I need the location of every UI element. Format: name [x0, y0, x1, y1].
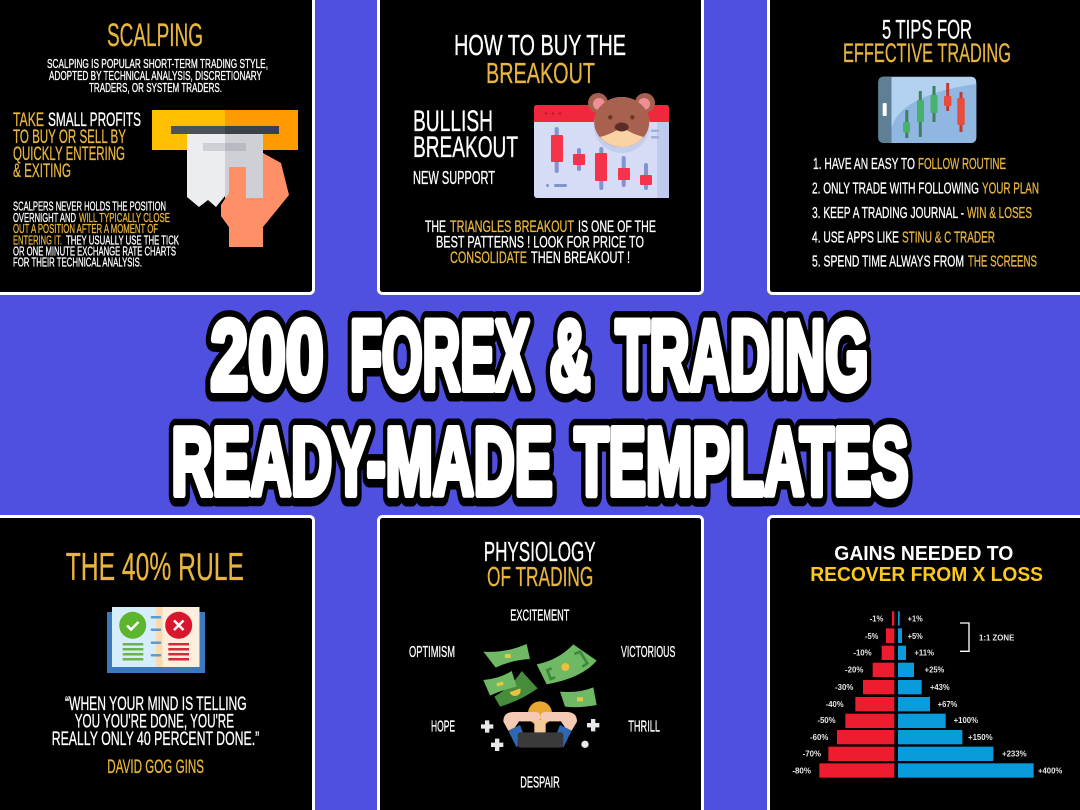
text block: bullish breakout: BREAKOUT — [413, 131, 518, 164]
text block: scalpers explanation: SCALPERS NEVER HOLDS THE POSITION — [13, 200, 166, 214]
gain labels — [908, 614, 1062, 776]
gain labels: +150% — [968, 733, 993, 742]
text block: quote: REALLY ONLY 40 PERCENT DONE.” — [52, 729, 259, 750]
icon: trader with falling money — [481, 644, 599, 751]
text block: tips list: FOLLOW ROUTINE — [918, 156, 1006, 173]
labels: emotions — [409, 608, 675, 791]
heading: physiology of trading — [484, 536, 596, 592]
text block: scalpers explanation — [13, 200, 179, 270]
bracket: 1:1 zone — [960, 623, 1015, 651]
gain labels: +1% — [908, 614, 923, 623]
text block: tips list: WIN & LOSES — [967, 205, 1032, 222]
loss bars — [819, 611, 894, 778]
text block: triangles breakout: TRIANGLES BREAKOUT — [450, 217, 574, 236]
text block: take small profits: SMALL PROFITS — [48, 109, 141, 131]
text block: take small profits: TAKE — [13, 109, 44, 131]
gain labels: +11% — [914, 649, 934, 658]
text block: triangles breakout: CONSOLIDATE — [450, 248, 527, 267]
labels: emotions: VICTORIOUS — [621, 644, 675, 661]
text block: tips list: YOUR PLAN — [982, 181, 1039, 198]
text: quote author: DAVID GOG GINS — [107, 756, 204, 778]
heading: how to buy the breakout: HOW TO BUY THE — [454, 30, 626, 62]
title: 200 forex and trading ready-made templates: TRADING — [616, 300, 868, 410]
panel: 5 tips — [768, 0, 1080, 294]
title: 200 forex and trading ready-made templates: READY-MADE — [172, 408, 552, 516]
text block: scalpers explanation: OVERNIGHT AND — [13, 211, 76, 225]
loss labels — [792, 614, 883, 776]
text block: scalping intro: SCALPING IS POPULAR SHORT-TERM TRADING STYLE, — [47, 56, 268, 71]
text block: triangles breakout: IS ONE OF THE — [578, 217, 656, 236]
text block: triangles breakout: THEN BREAKOUT ! — [531, 248, 630, 267]
text block: tips list: 5. SPEND TIME ALWAYS FROM — [812, 254, 964, 271]
text block: bullish breakout — [413, 105, 518, 188]
icon: pros and cons book — [107, 607, 205, 673]
gain bars — [898, 611, 1034, 778]
labels: emotions: DESPAIR — [520, 774, 560, 791]
text block: tips list: 4. USE APPS LIKE — [812, 229, 899, 246]
text block: scalping intro — [47, 56, 268, 95]
loss labels: -70% — [803, 750, 821, 759]
heading: gains needed to recover: RECOVER FROM X LOSS — [810, 564, 1043, 586]
loss labels: -10% — [853, 649, 872, 658]
text block: quote: YOU YOU'RE DONE, YOU'RE — [75, 712, 234, 733]
heading: 5 tips for effective trading: 5 TIPS FOR — [882, 14, 972, 44]
gain labels: +25% — [925, 666, 944, 675]
icon: phone with candlesticks — [878, 77, 976, 143]
labels: emotions: THRILL — [628, 718, 660, 735]
bracket: 1:1 zone: 1:1 ZONE — [979, 633, 1015, 642]
title: 200 forex and trading ready-made templates: 200 — [210, 300, 324, 412]
text block: take small profits: TO BUY OR SELL BY — [13, 126, 126, 148]
chart: loss and recovery pyramid — [792, 611, 1062, 778]
title: 200 forex and trading ready-made templates: FOREX — [350, 300, 530, 410]
text block: scalpers explanation: ENTERING IT. — [13, 234, 62, 248]
labels: emotions: EXCITEMENT — [510, 608, 570, 625]
heading: how to buy the breakout: BREAKOUT — [486, 58, 595, 90]
heading: gains needed to recover — [810, 543, 1043, 586]
loss labels: -1% — [870, 614, 883, 623]
loss labels: -50% — [817, 716, 836, 725]
title: 200 forex and trading ready-made templates: 200 — [210, 300, 324, 410]
text block: triangles breakout: THE — [425, 217, 446, 236]
heading: physiology of trading: PHYSIOLOGY — [484, 536, 596, 567]
loss labels: -80% — [792, 767, 811, 776]
gain labels: +5% — [908, 632, 923, 641]
text block: scalpers explanation: WILL TYPICALLY CLOSE — [79, 211, 170, 225]
panel: scalping — [0, 0, 314, 294]
text block: triangles breakout — [425, 217, 656, 267]
title: 200 forex and trading ready-made templates: & — [550, 300, 590, 412]
text block: scalpers explanation: OR ONE MINUTE EXCHANGE RATE CHARTS — [13, 244, 176, 258]
title: 200 forex and trading ready-made templates — [172, 300, 908, 516]
title: 200 forex and trading ready-made templates: & — [550, 300, 590, 410]
title: 200 forex and trading ready-made templates: FOREX — [350, 300, 530, 412]
loss labels: -60% — [810, 733, 828, 742]
text block: triangles breakout: BEST PATTERNS ! LOOK FOR PRICE TO — [436, 232, 644, 252]
text block: take small profits: & EXITING — [13, 160, 71, 182]
heading: physiology of trading: OF TRADING — [487, 561, 593, 592]
text block: quote: “WHEN YOUR MIND IS TELLING — [65, 694, 247, 715]
loss labels: -20% — [845, 666, 863, 675]
text block: quote — [52, 694, 259, 750]
panel: 40 percent rule — [0, 516, 314, 810]
heading: 5 tips for effective trading — [843, 14, 1011, 68]
loss labels: -5% — [865, 632, 878, 641]
panel: gains needed to recover — [768, 516, 1080, 810]
text block: take small profits — [13, 109, 141, 182]
text block: tips list: THE SCREENS — [968, 254, 1037, 271]
text block: tips list: 1. HAVE AN EASY TO — [813, 156, 915, 173]
text block: tips list: 2. ONLY TRADE WITH FOLLOWING — [812, 181, 979, 198]
gain labels: +100% — [954, 716, 978, 725]
text block: scalping intro: TRADERS, OR SYSTEM TRADERS. — [89, 80, 222, 95]
text block: scalping intro: ADOPTED BY TECHNICAL ANALYSIS, DISCRETIONARY — [49, 68, 262, 83]
text block: scalpers explanation: THEY USUALLY USE THE TICK — [66, 234, 179, 248]
labels: emotions: HOPE — [431, 718, 455, 735]
text block: bullish breakout: BULLISH — [413, 105, 493, 138]
title: 200 forex and trading ready-made templates: TRADING — [616, 300, 868, 412]
heading: scalping: SCALPING — [107, 17, 203, 53]
icon: hand taking receipt from slot — [152, 110, 298, 247]
heading: gains needed to recover: GAINS NEEDED TO — [834, 543, 1013, 565]
text block: take small profits: QUICKLY ENTERING — [13, 143, 125, 165]
gain labels: +43% — [930, 683, 950, 692]
gain labels: +233% — [1002, 750, 1027, 759]
heading: how to buy the breakout — [454, 30, 626, 90]
panel: breakout — [378, 0, 702, 294]
icon: candlestick window with bear — [534, 93, 669, 198]
loss labels: -30% — [835, 683, 853, 692]
gain labels: +400% — [1038, 767, 1062, 776]
title: 200 forex and trading ready-made templates: READY-MADE — [172, 410, 552, 516]
heading: the 40% rule: THE 40% RULE — [66, 546, 244, 589]
loss labels: -40% — [826, 700, 844, 709]
panel: physiology of trading — [378, 516, 702, 810]
labels: emotions: OPTIMISM — [409, 644, 455, 661]
text block: tips list: STINU & C TRADER — [902, 229, 995, 246]
text block: bullish breakout: NEW SUPPORT — [413, 168, 495, 188]
text block: scalpers explanation: FOR THEIR TECHNICAL ANALYSIS. — [13, 256, 142, 270]
text block: tips list: 3. KEEP A TRADING JOURNAL - — [812, 205, 964, 222]
gain labels: +67% — [938, 700, 957, 709]
text block: tips list — [812, 156, 1039, 271]
text block: scalpers explanation: OUT A POSITION AFTER A MOMENT OF — [13, 222, 158, 236]
